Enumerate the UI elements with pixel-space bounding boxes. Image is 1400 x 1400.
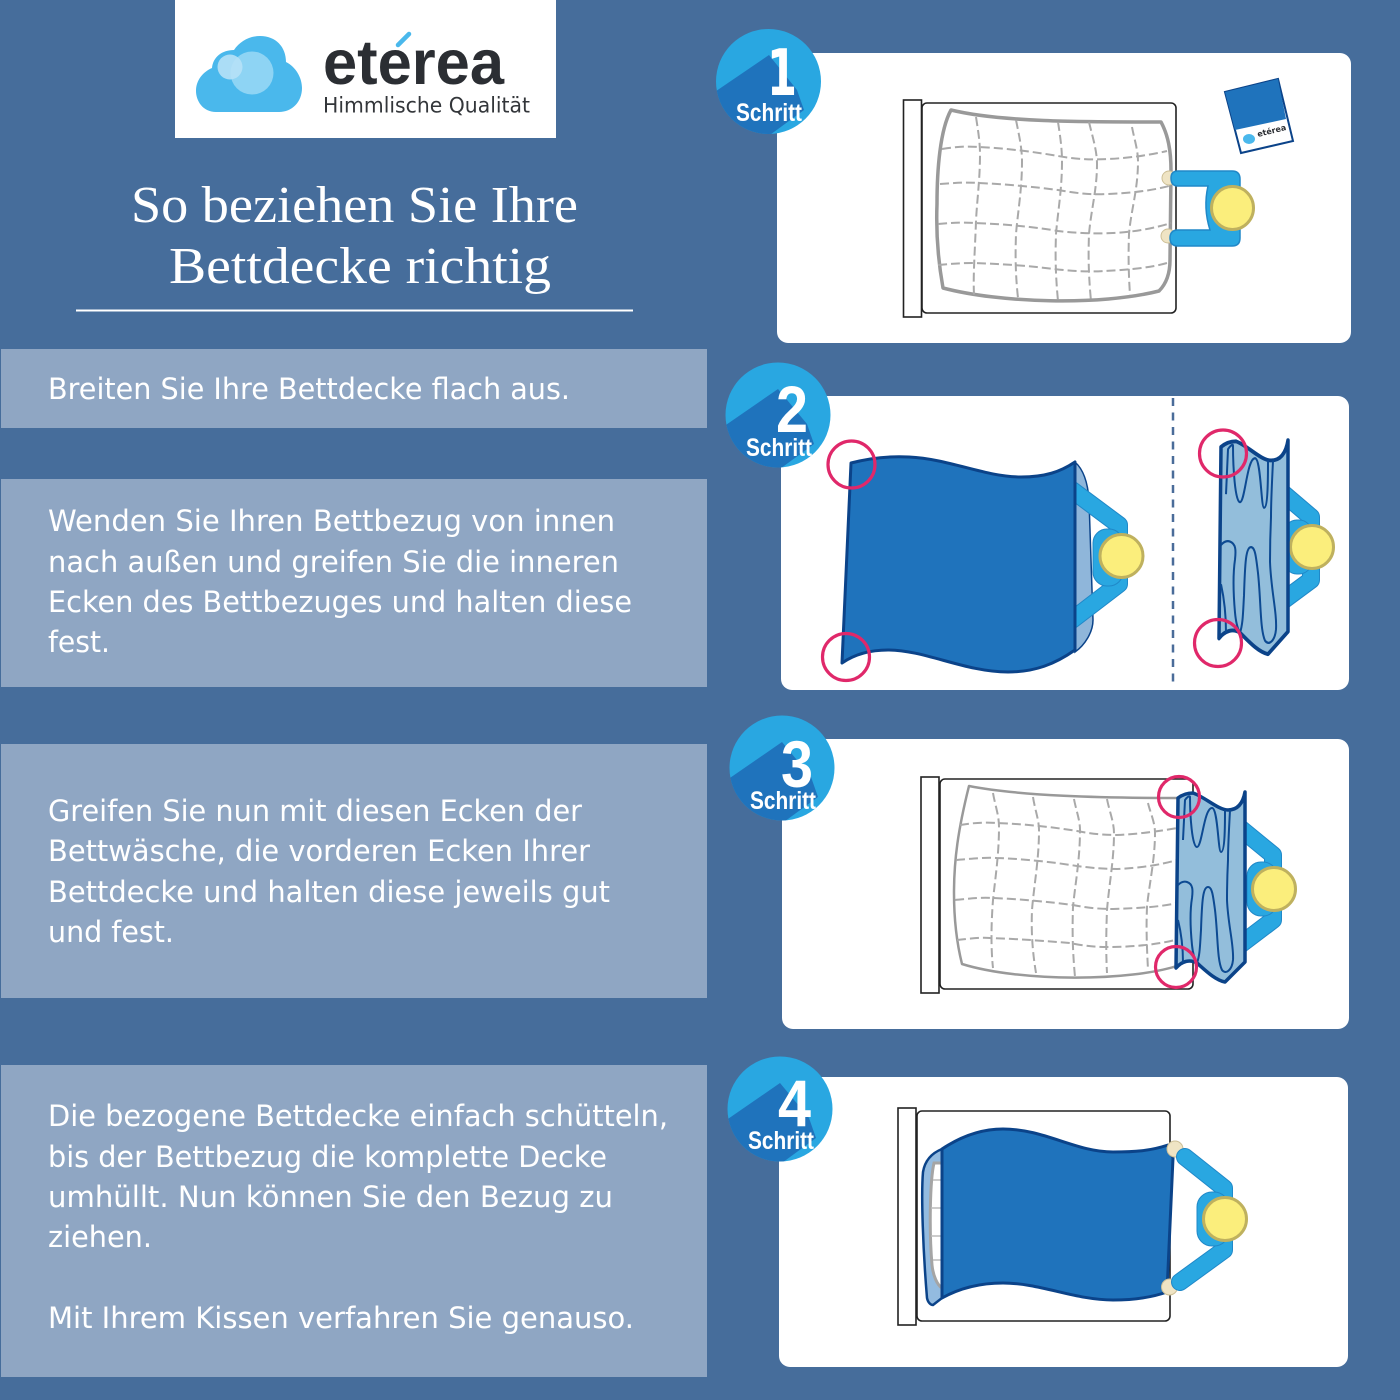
panel: text step 2: Ecken des Bettbezuges und halten diese bbox=[48, 585, 632, 619]
panel: text step 4: Die bezogene Bettdecke einfach schütteln, bbox=[48, 1099, 668, 1133]
hands bbox=[1162, 1141, 1183, 1295]
title bbox=[131, 177, 578, 295]
headboard bbox=[898, 1108, 916, 1325]
badge: step 4: 4 bbox=[778, 1066, 811, 1140]
badge: step 2: Schritt bbox=[746, 434, 813, 462]
person bbox=[1161, 171, 1254, 246]
duvet cover bbox=[942, 1129, 1173, 1300]
divider bbox=[1172, 398, 1174, 686]
quilt bbox=[954, 786, 1180, 978]
red circle top bbox=[828, 441, 875, 488]
accent mask bbox=[385, 26, 419, 48]
red circle right bottom bbox=[1194, 620, 1242, 666]
panel: text step 4: bis der Bettbezug die komplette Decke bbox=[48, 1140, 607, 1174]
panel: text step 3: und fest. bbox=[48, 915, 174, 949]
bed bbox=[922, 103, 1176, 313]
panel: text step 1 bbox=[1, 349, 707, 428]
badge: step 3 bbox=[730, 716, 834, 820]
panel: text step 4 bbox=[1, 1065, 707, 1377]
panel: text step 3: Bettwäsche, die vorderen Ecken Ihrer bbox=[48, 834, 590, 868]
person bbox=[1240, 828, 1296, 945]
badge: step 1: Schritt bbox=[736, 99, 803, 127]
red circle top bbox=[1158, 776, 1200, 818]
accent on brand name bbox=[398, 34, 409, 45]
badge: step 4: Schritt bbox=[748, 1127, 815, 1155]
brand name: etérea bbox=[323, 28, 505, 98]
person left bbox=[1072, 490, 1143, 620]
panel: text step 4: Mit Ihrem Kissen verfahren Sie genauso. bbox=[48, 1301, 634, 1335]
panel: text step 2 bbox=[1, 479, 707, 687]
icon: cloud bbox=[196, 36, 302, 112]
panel: text step 3: Bettdecke und halten diese jeweils gut bbox=[48, 875, 610, 909]
panel: text step 4: ziehen. bbox=[48, 1220, 152, 1254]
quilt bbox=[937, 110, 1171, 301]
person right bbox=[1284, 494, 1334, 600]
icon: packaging: etérea bbox=[1256, 122, 1287, 139]
panel: illustration step 3 bbox=[782, 739, 1349, 1029]
badge: step 3: Schritt bbox=[750, 787, 817, 815]
panel: illustration step 2 bbox=[781, 396, 1349, 690]
bed bbox=[917, 1111, 1170, 1321]
panel: illustration step 4 bbox=[779, 1077, 1348, 1367]
title: Bettdecke richtig bbox=[169, 238, 551, 295]
title: So beziehen Sie Ihre bbox=[131, 177, 578, 234]
headboard bbox=[921, 777, 939, 993]
panel: illustration step 1 bbox=[777, 53, 1351, 343]
panel: text step 4: umhüllt. Nun können Sie den Bezug zu bbox=[48, 1180, 613, 1214]
headboard bbox=[904, 100, 922, 317]
badge: step 1: 1 bbox=[767, 37, 797, 111]
red circle right top bbox=[1200, 430, 1246, 477]
duvet cover front bbox=[842, 457, 1075, 672]
bed bbox=[940, 779, 1193, 989]
turned cover right bbox=[1219, 440, 1288, 654]
badge: step 3: 3 bbox=[781, 727, 813, 801]
red circle bottom bbox=[1156, 946, 1196, 988]
panel: text step 3 bbox=[1, 744, 707, 998]
panel: text step 1: Breiten Sie Ihre Bettdecke flach aus. bbox=[48, 372, 570, 406]
person bbox=[1180, 1157, 1246, 1282]
logo panel bbox=[175, 0, 556, 138]
duvet cover back bbox=[1075, 462, 1093, 652]
head bbox=[1212, 186, 1254, 230]
badge: step 4 bbox=[728, 1056, 832, 1162]
badge: step 2: 2 bbox=[776, 372, 808, 446]
panel: text step 3: Greifen Sie nun mit diesen Ecken der bbox=[48, 794, 582, 828]
badge: step 1 bbox=[716, 29, 821, 134]
badge: step 2 bbox=[726, 362, 830, 468]
turned cover bbox=[1176, 792, 1245, 982]
red circle bottom bbox=[822, 634, 870, 680]
tagline: Himmlische Qualität bbox=[323, 94, 530, 118]
icon: packaging bbox=[1225, 79, 1293, 153]
panel: text step 2: fest. bbox=[48, 625, 110, 659]
quilt edge bbox=[922, 1149, 942, 1305]
panel: text step 2: nach außen und greifen Sie die inneren bbox=[48, 545, 619, 579]
panel: text step 2: Wenden Sie Ihren Bettbezug von innen bbox=[48, 504, 615, 538]
